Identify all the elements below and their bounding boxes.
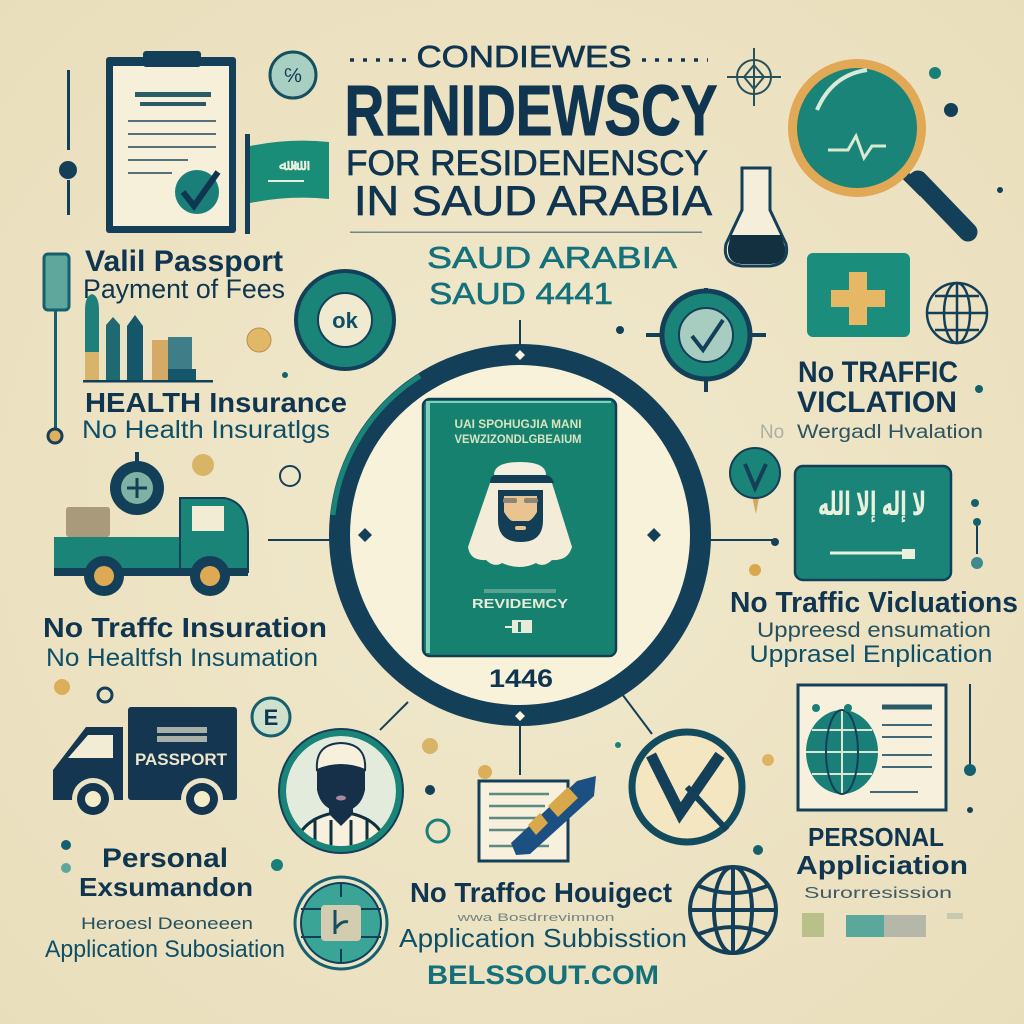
icon: teal round seal <box>295 877 387 969</box>
icon: Saudi flag card: لا إله إلا الله <box>818 486 926 524</box>
heading: no traffic housect: No Traffoc Houigect <box>410 877 672 908</box>
icon: medical cross card <box>807 253 910 337</box>
heading: no traffic violation: Wergadl Hvalation <box>797 422 983 443</box>
title: FOR RESIDENENSCY <box>346 144 708 183</box>
icon: small teal seal <box>270 52 316 98</box>
icon: X-check circle <box>632 732 742 842</box>
heading: personal examination <box>45 843 285 963</box>
heading: personal application: Appliciation <box>796 850 968 880</box>
heading: no traffic violation: No TRAFFIC <box>798 356 958 389</box>
small document thumbnails <box>802 913 963 937</box>
icon: letter badge: E <box>264 705 278 730</box>
title: IN SAUD ARABIA <box>354 177 712 224</box>
heading: no traffic violations: Uppreesd ensumation <box>757 619 991 642</box>
heading: no traffic violation: VICLATION <box>797 386 957 419</box>
icon: globe document <box>798 685 946 810</box>
central circle with passport <box>329 344 711 726</box>
icon: Saudi flag card <box>795 466 951 580</box>
icon: city skyline <box>83 294 213 382</box>
connector lines <box>268 320 774 775</box>
heading: personal application: PERSONAL <box>808 822 944 852</box>
title: CONDIEWES <box>416 39 632 74</box>
heading: no traffic housect <box>399 877 687 953</box>
icon: thermometer tube <box>44 254 69 443</box>
subtitle <box>427 240 677 311</box>
heading: no traffic insuration <box>43 612 327 672</box>
heading: valid passport: Payment of Fees <box>83 274 285 304</box>
heading: no traffic violations <box>730 587 1018 668</box>
heading: health insurance <box>82 387 347 444</box>
passport: REVIDEMCY <box>472 596 568 611</box>
heading: personal examination: Exsumandon <box>79 872 253 902</box>
passport <box>423 399 616 656</box>
icon: check pin <box>730 448 780 514</box>
heading: personal examination: Personal <box>102 843 228 873</box>
heading: health insurance: No Health Insuratlgs <box>82 416 330 444</box>
heading: personal examination: Application Subosiation <box>45 936 285 963</box>
heading: personal examination: Heroesl Deoneeen <box>81 914 253 933</box>
icon: magnifying glass <box>788 59 968 232</box>
icon: Saudi flag on pole <box>245 134 329 234</box>
icon: round clock badge <box>110 452 300 515</box>
icon: check target badge <box>646 288 766 392</box>
icon: teal ring badge: ok <box>332 308 359 333</box>
title <box>344 39 718 233</box>
icon: wire globe <box>690 867 776 953</box>
heading: no traffic violation: No <box>760 422 784 443</box>
heading: health insurance: HEALTH Insurance <box>85 387 347 418</box>
heading: valid passport: Valil Passport <box>85 245 283 278</box>
icon: passport van: PASSPORT <box>135 750 228 769</box>
heading: no traffic housect: Application Subbisstion <box>399 923 687 953</box>
heading: valid passport <box>83 245 285 304</box>
subtitle: SAUD 4441 <box>429 276 613 311</box>
title: RENIDEWSCY <box>344 72 718 151</box>
icon: Saudi flag on pole: ﷲ ﷲ <box>279 157 310 174</box>
scattered dots <box>54 70 983 873</box>
heading: personal application <box>796 822 968 902</box>
passport: VEWZIZONDLGBEAIUM <box>454 432 582 446</box>
icon: letter badge <box>252 698 290 736</box>
website footer: BELSSOUT.COM <box>427 960 659 990</box>
icon: small teal seal: ℅ <box>284 65 302 87</box>
decorative right icons top <box>929 67 1003 193</box>
subtitle: SAUD ARABIA <box>427 240 677 275</box>
heading: no traffic housect: wwa Bosdrrevimnon <box>456 912 614 924</box>
icon: passport van <box>53 707 237 820</box>
passport: UAI SPOHUGJIA MANI <box>454 417 582 431</box>
heading: personal application: Surorresission <box>804 885 952 902</box>
icon: flask <box>725 168 787 266</box>
heading: no traffic insuration: No Healtfsh Insumation <box>46 644 318 672</box>
central circle with passport: 1446 <box>489 665 553 693</box>
heading: no traffic violations: No Traffic Vicluations <box>730 587 1018 619</box>
icon: clipboard with checkmark <box>106 51 236 233</box>
heading: no traffic violations: Upprasel Enplication <box>750 641 992 668</box>
heading: no traffic insuration: No Traffc Insuration <box>43 612 327 643</box>
icon: globe with crosshair <box>927 283 987 343</box>
heading: no traffic violation <box>760 356 983 443</box>
icon: compass crosshair top <box>727 48 781 106</box>
icon: document with pen <box>479 776 596 861</box>
icon: person portrait <box>279 729 403 853</box>
icon: teal ring badge <box>247 271 394 378</box>
icon: truck teal <box>54 498 248 596</box>
